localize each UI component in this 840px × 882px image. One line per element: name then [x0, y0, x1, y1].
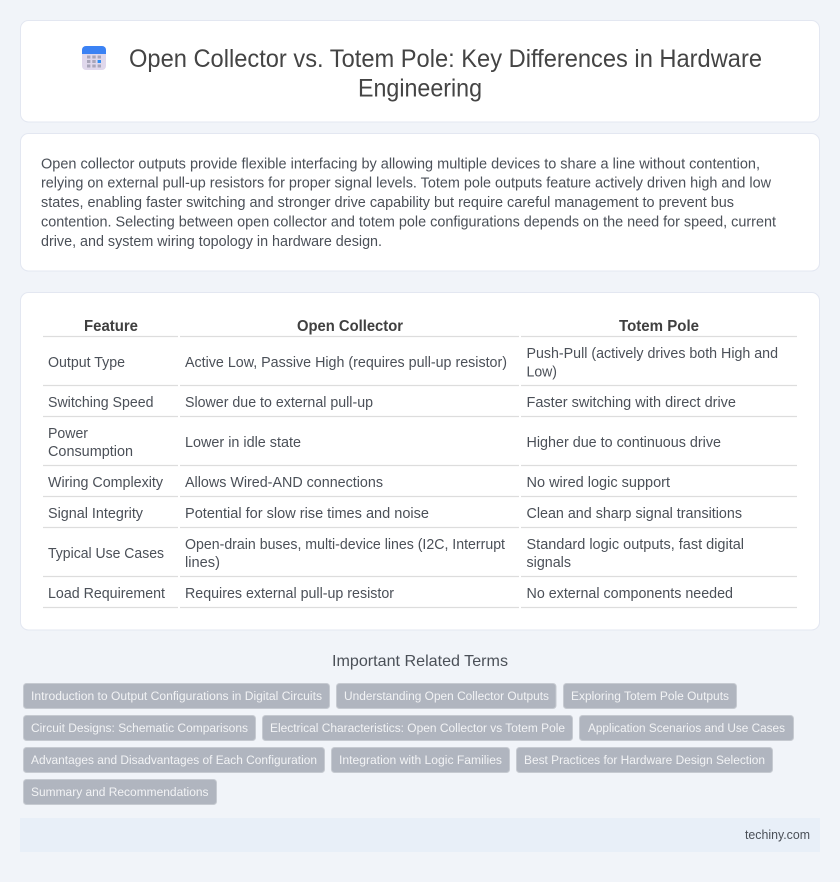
- row: output type: [48, 346, 778, 380]
- tag: advantages: Advantages and Disadvantages of Each Configuration: [31, 753, 317, 767]
- row: load requirement: [48, 586, 733, 602]
- tag: application scenarios: [580, 716, 794, 740]
- row: power consumption: Power: [48, 426, 88, 442]
- row: signal integrity: Potential for slow rise times and noise: [185, 506, 429, 522]
- row: switching speed: [48, 395, 736, 411]
- table header row: Feature: [84, 318, 138, 335]
- tag: circuit designs: Circuit Designs: Schematic Comparisons: [31, 721, 248, 735]
- row: typical use cases: [48, 537, 744, 571]
- tag: circuit designs: [24, 716, 256, 740]
- title: Open Collector vs. Totem Pole: Key Differences in Hardware: [129, 45, 762, 73]
- footer bar: [20, 818, 820, 852]
- row: typical use cases: lines): [185, 555, 220, 571]
- tag: electrical characteristics: Electrical Characteristics: Open Collector vs Totem Pole: [270, 721, 565, 735]
- intro text block: Open collector outputs provide flexible interfacing by allowing multiple devices to share a line without contention,: [41, 156, 760, 172]
- row: typical use cases: Open-drain buses, multi-device lines (I2C, Interrupt: [185, 537, 505, 553]
- row: power consumption: Consumption: [48, 444, 133, 460]
- tag: summary: [24, 780, 216, 804]
- row: signal integrity: Clean and sharp signal transitions: [526, 506, 742, 522]
- tag: open collector outputs: [336, 684, 556, 708]
- tag: open collector outputs: Understanding Open Collector Outputs: [344, 689, 549, 703]
- row: wiring complexity: Allows Wired-AND connections: [185, 475, 383, 491]
- panel: introduction: [20, 134, 820, 271]
- title: [129, 45, 762, 102]
- tag: totem pole outputs: Exploring Totem Pole Outputs: [571, 689, 729, 703]
- table header row: [84, 318, 699, 335]
- tag: introduction: Introduction to Output Configurations in Digital Circuits: [31, 689, 322, 703]
- title: Engineering: [358, 74, 482, 102]
- tag: summary: Summary and Recommendations: [31, 785, 208, 799]
- intro text block: relying on external pull-up resistors for proper signal levels. Totem pole outputs feature actively driven high and low: [41, 176, 772, 192]
- row: output type: Push-Pull (actively drives both High and: [526, 346, 778, 362]
- tag: electrical characteristics: [262, 716, 572, 740]
- panel: comparison table: [20, 292, 820, 630]
- heading: important related terms: Important Related Terms: [332, 653, 508, 670]
- intro text block: states, enabling faster switching and stronger drive capability but require careful management to prevent bus: [41, 195, 734, 211]
- intro text block: [41, 156, 776, 250]
- row: switching speed: Switching Speed: [48, 395, 154, 411]
- row: typical use cases: Typical Use Cases: [48, 546, 164, 562]
- row: power consumption: [48, 426, 721, 460]
- intro text block: drive, and system wiring topology in hardware design.: [41, 234, 382, 250]
- row: switching speed: Faster switching with direct drive: [526, 395, 736, 411]
- icon: calendar: [82, 46, 106, 70]
- row: load requirement: Requires external pull-up resistor: [185, 586, 394, 602]
- tag: logic families: [332, 748, 510, 772]
- row: typical use cases: Standard logic outputs, fast digital: [526, 537, 744, 553]
- row: power consumption: Lower in idle state: [185, 435, 301, 451]
- row: typical use cases: signals: [526, 555, 571, 571]
- row: wiring complexity: Wiring Complexity: [48, 475, 164, 491]
- row: output type: Low): [526, 364, 557, 380]
- related terms tags: [24, 684, 794, 804]
- row: load requirement: Load Requirement: [48, 586, 165, 602]
- row: power consumption: Higher due to continuous drive: [526, 435, 721, 451]
- tag: introduction: [24, 684, 330, 708]
- header panel: [20, 20, 820, 122]
- tag: advantages: [24, 748, 324, 772]
- tag: logic families: Integration with Logic Families: [339, 753, 502, 767]
- row: output type: Active Low, Passive High (requires pull-up resistor): [185, 355, 507, 371]
- table header row: Totem Pole: [619, 318, 699, 335]
- row: output type: Output Type: [48, 355, 125, 371]
- row: signal integrity: [48, 506, 742, 522]
- row: signal integrity: Signal Integrity: [48, 506, 144, 522]
- table header row: Open Collector: [297, 318, 403, 335]
- row: load requirement: No external components needed: [526, 586, 733, 602]
- tag: best practices: [516, 748, 772, 772]
- tag: totem pole outputs: [564, 684, 736, 708]
- row: wiring complexity: [48, 475, 670, 491]
- row: wiring complexity: No wired logic support: [526, 475, 670, 491]
- tag: best practices: Best Practices for Hardware Design Selection: [524, 753, 765, 767]
- footer credit: techiny.com: [745, 827, 810, 842]
- tag: application scenarios: Application Scenarios and Use Cases: [588, 721, 785, 735]
- row: switching speed: Slower due to external pull-up: [185, 395, 373, 411]
- intro text block: contention. Selecting between open collector and totem pole configurations depends on the need for speed, current: [41, 214, 776, 230]
